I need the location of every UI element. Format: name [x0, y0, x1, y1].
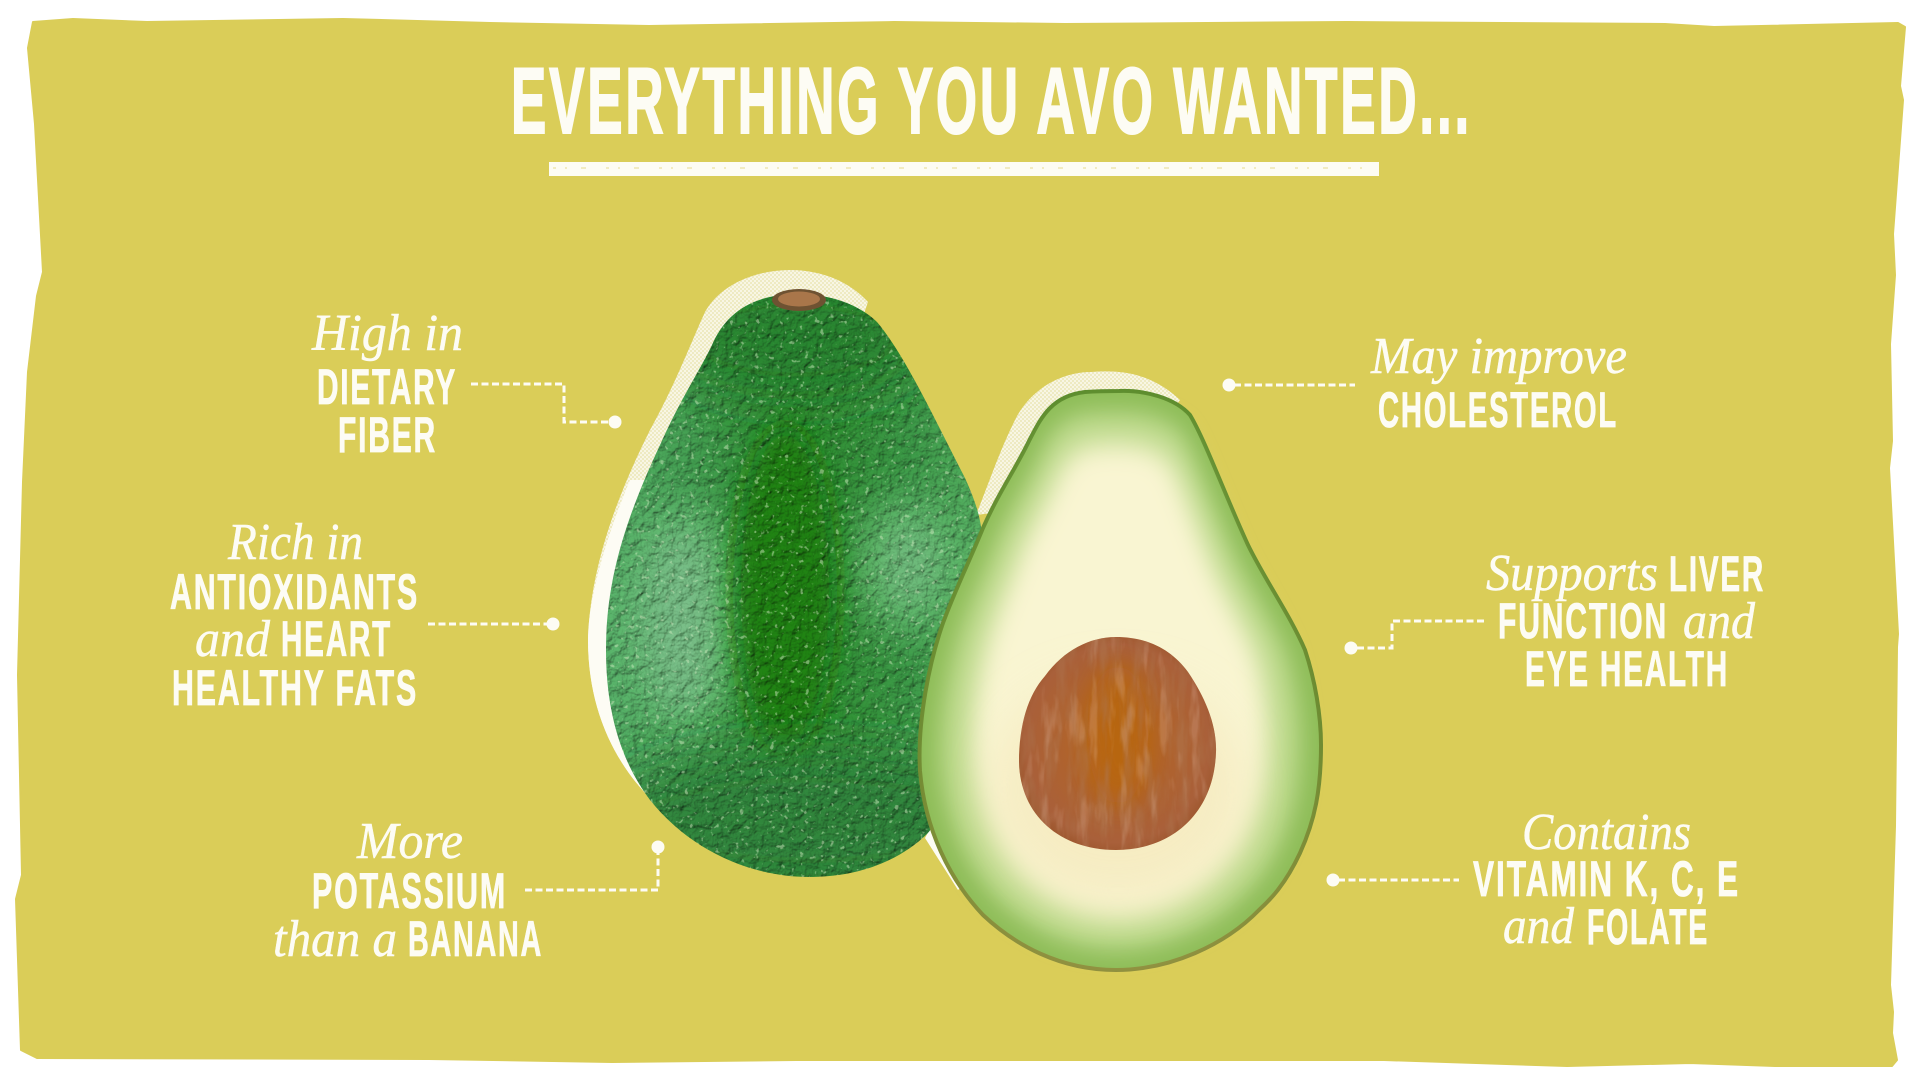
- callout: contains vitamin k, c, e and folate: Contains: [1522, 804, 1691, 861]
- callout: more potassium than a banana: [273, 813, 664, 968]
- illustration: whole and halved avocado: [588, 270, 1321, 970]
- callout: may improve cholesterol: [1222, 328, 1627, 438]
- callout: high in dietary fiber: FIBER: [338, 407, 437, 463]
- callout: high in dietary fiber: [311, 305, 622, 463]
- callout: rich in antioxidants and heart healthy fats: HEART: [281, 611, 392, 667]
- avocado pit: [1019, 637, 1216, 850]
- leader line: [471, 384, 622, 428]
- title underline: [549, 162, 1379, 176]
- callout: supports liver function and eye health: Supports: [1486, 545, 1658, 602]
- callout: supports liver function and eye health: and: [1683, 593, 1756, 650]
- callout: may improve cholesterol: CHOLESTEROL: [1378, 382, 1618, 438]
- avocado stem: [772, 289, 826, 311]
- callout: rich in antioxidants and heart healthy fats: Rich in: [227, 514, 363, 571]
- halftone halo behind halved avocado: [976, 371, 1180, 515]
- leader line: [428, 618, 560, 630]
- callout: contains vitamin k, c, e and folate: [1326, 804, 1740, 955]
- leader line: [1326, 874, 1459, 886]
- callout: may improve cholesterol: May improve: [1370, 328, 1627, 385]
- callout: rich in antioxidants and heart healthy fats: and: [195, 611, 271, 668]
- callout: rich in antioxidants and heart healthy fats: ANTIOXIDANTS: [170, 564, 419, 620]
- callout: more potassium than a banana: More: [356, 813, 463, 870]
- halftone halo behind whole avocado: [588, 270, 868, 803]
- white lower part of whole avocado halo: [588, 480, 700, 803]
- callout: high in dietary fiber: DIETARY: [317, 359, 457, 415]
- callout: contains vitamin k, c, e and folate: and: [1503, 898, 1575, 955]
- callout: supports liver function and eye health: [1344, 545, 1765, 697]
- callout: supports liver function and eye health: FUNCTION: [1498, 593, 1668, 649]
- halved avocado: [920, 391, 1321, 970]
- callout: supports liver function and eye health: EYE HEALTH: [1525, 641, 1729, 697]
- leader line: [525, 840, 664, 890]
- leader line: [1344, 621, 1484, 654]
- callout: rich in antioxidants and heart healthy fats: [170, 514, 560, 716]
- callout: more potassium than a banana: BANANA: [408, 911, 543, 967]
- callout: more potassium than a banana: than a: [273, 911, 397, 968]
- callout: rich in antioxidants and heart healthy fats: HEALTHY FATS: [172, 660, 418, 716]
- callout: contains vitamin k, c, e and folate: VITAMIN K, C, E: [1473, 851, 1740, 907]
- callout: high in dietary fiber: High in: [311, 305, 463, 362]
- callout: contains vitamin k, c, e and folate: FOLATE: [1587, 899, 1709, 955]
- callout: supports liver function and eye health: LIVER: [1669, 546, 1765, 602]
- leader line: [1222, 378, 1355, 392]
- callout: more potassium than a banana: POTASSIUM: [312, 863, 507, 919]
- white cut-out halo lower left of halved avocado: [925, 810, 990, 890]
- whole avocado: [606, 296, 981, 877]
